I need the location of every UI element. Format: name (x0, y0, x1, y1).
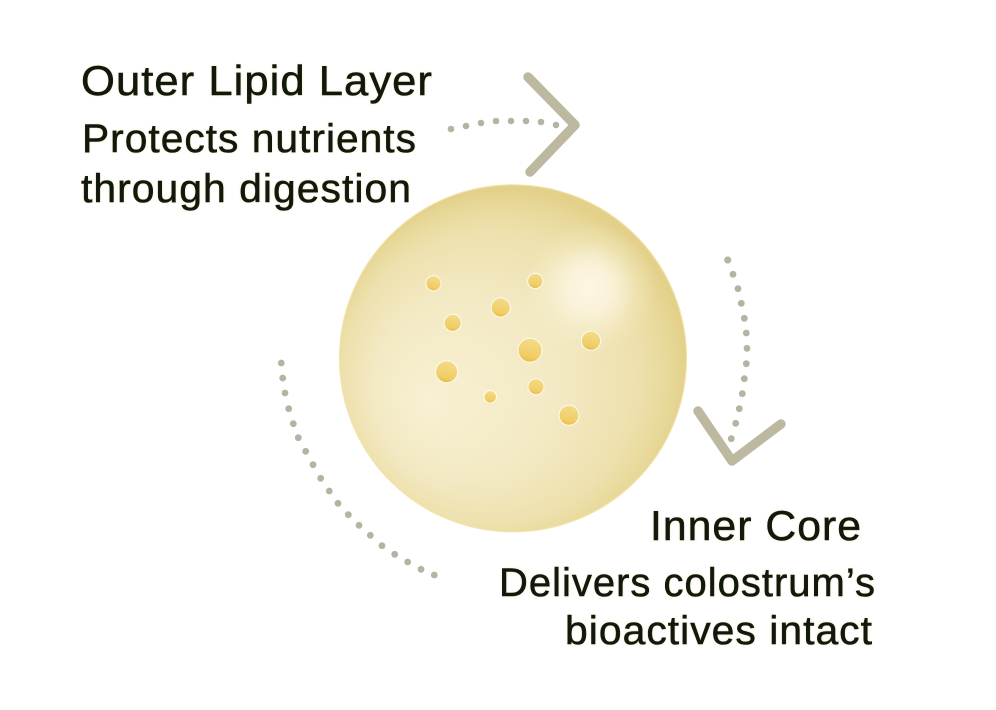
text block: protects nutrients through digestion: through digestion (81, 167, 412, 211)
text block: delivers colostrum's bioactives intact: bioactives intact (565, 609, 873, 653)
sphere: lipid particle (340, 185, 686, 532)
dotted arc: lower left (278, 360, 438, 578)
text block: protects nutrients through digestion: Protects nutrients (82, 117, 417, 161)
text block: delivers colostrum's bioactives intact: Delivers colostrum’s (499, 561, 876, 605)
arrow: top dotted arrow (448, 77, 575, 172)
text block: delivers colostrum's bioactives intact (499, 561, 876, 653)
arrow: right dotted arrow (698, 256, 781, 461)
text block: protects nutrients through digestion (81, 117, 417, 211)
heading: inner core: Inner Core (650, 502, 862, 549)
heading: outer lipid layer: Outer Lipid Layer (81, 57, 433, 104)
inner core bubbles (426, 273, 601, 425)
